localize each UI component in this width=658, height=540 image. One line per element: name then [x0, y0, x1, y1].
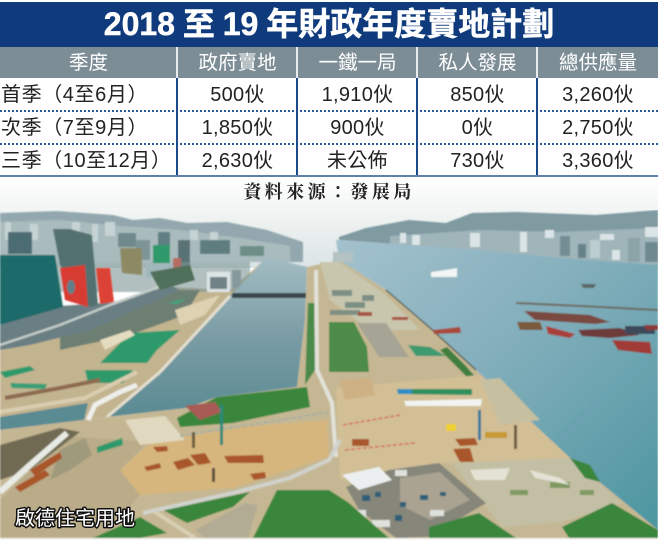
row: third quarter: 3,360伙	[562, 150, 634, 172]
white ferry	[431, 268, 457, 277]
left bank green nets	[0, 295, 220, 389]
construction equipment	[97, 405, 517, 482]
bridge over the canal	[232, 293, 310, 298]
photo caption: 啟德住宅用地	[15, 507, 135, 530]
header row: 一鐵一局	[318, 52, 396, 74]
header row	[0, 47, 658, 78]
left hills and city	[0, 211, 303, 280]
blue and white long buildings	[397, 389, 482, 406]
title	[0, 2, 658, 47]
row: third quarter: 2,630伙	[202, 150, 273, 172]
title: 2018 至 19 年財政年度賣地計劃	[104, 6, 554, 42]
runway central site	[336, 375, 570, 480]
row: first quarter: 首季（4至6月）	[1, 84, 148, 106]
row: second quarter: 次季（7至9月）	[1, 117, 148, 139]
main Kai Tak residential site	[120, 420, 329, 495]
right hills and Kowloon Bay shore city	[339, 210, 658, 265]
roads	[0, 385, 415, 538]
left commercial buildings	[0, 229, 250, 350]
sky	[0, 178, 658, 268]
row: second quarter: 900伙	[330, 117, 385, 139]
table: land sale plan	[0, 0, 658, 178]
row: third quarter	[1, 150, 634, 172]
trees	[93, 387, 658, 538]
row: first quarter: 500伙	[210, 84, 265, 106]
row: second quarter: 2,750伙	[562, 117, 634, 139]
row: first quarter: 3,260伙	[562, 84, 634, 106]
bottom strip	[0, 538, 658, 540]
header row: 季度	[69, 52, 108, 74]
harbour water	[336, 240, 658, 530]
header row: 政府賣地	[198, 52, 276, 74]
header row: 私人發展	[438, 52, 516, 74]
lower left site	[0, 430, 150, 540]
row: third quarter: 730伙	[450, 150, 505, 172]
canal water	[107, 257, 307, 417]
junkyard	[346, 463, 486, 538]
left shore land	[0, 262, 268, 420]
row: third quarter: 三季（10至12月）	[1, 150, 172, 172]
row: second quarter: 0伙	[462, 117, 493, 139]
canal left edge wall	[107, 296, 230, 417]
row: first quarter	[1, 84, 634, 106]
row: first quarter: 1,910伙	[322, 84, 393, 106]
breakwater	[516, 303, 658, 310]
row: first quarter: 850伙	[450, 84, 505, 106]
pale eastern site	[452, 458, 622, 527]
row: second quarter	[1, 117, 634, 139]
source note: 資料來源：發展局	[243, 182, 415, 202]
row: third quarter: 未公佈	[327, 150, 388, 172]
moored barges	[433, 284, 658, 354]
steel piles	[15, 438, 478, 492]
white roof shed	[342, 467, 392, 490]
runway land	[0, 260, 658, 538]
row: second quarter: 1,850伙	[202, 117, 273, 139]
header row: 總供應量	[559, 52, 637, 74]
harbour side of runway detail	[305, 252, 485, 457]
old building among trees	[185, 402, 222, 420]
